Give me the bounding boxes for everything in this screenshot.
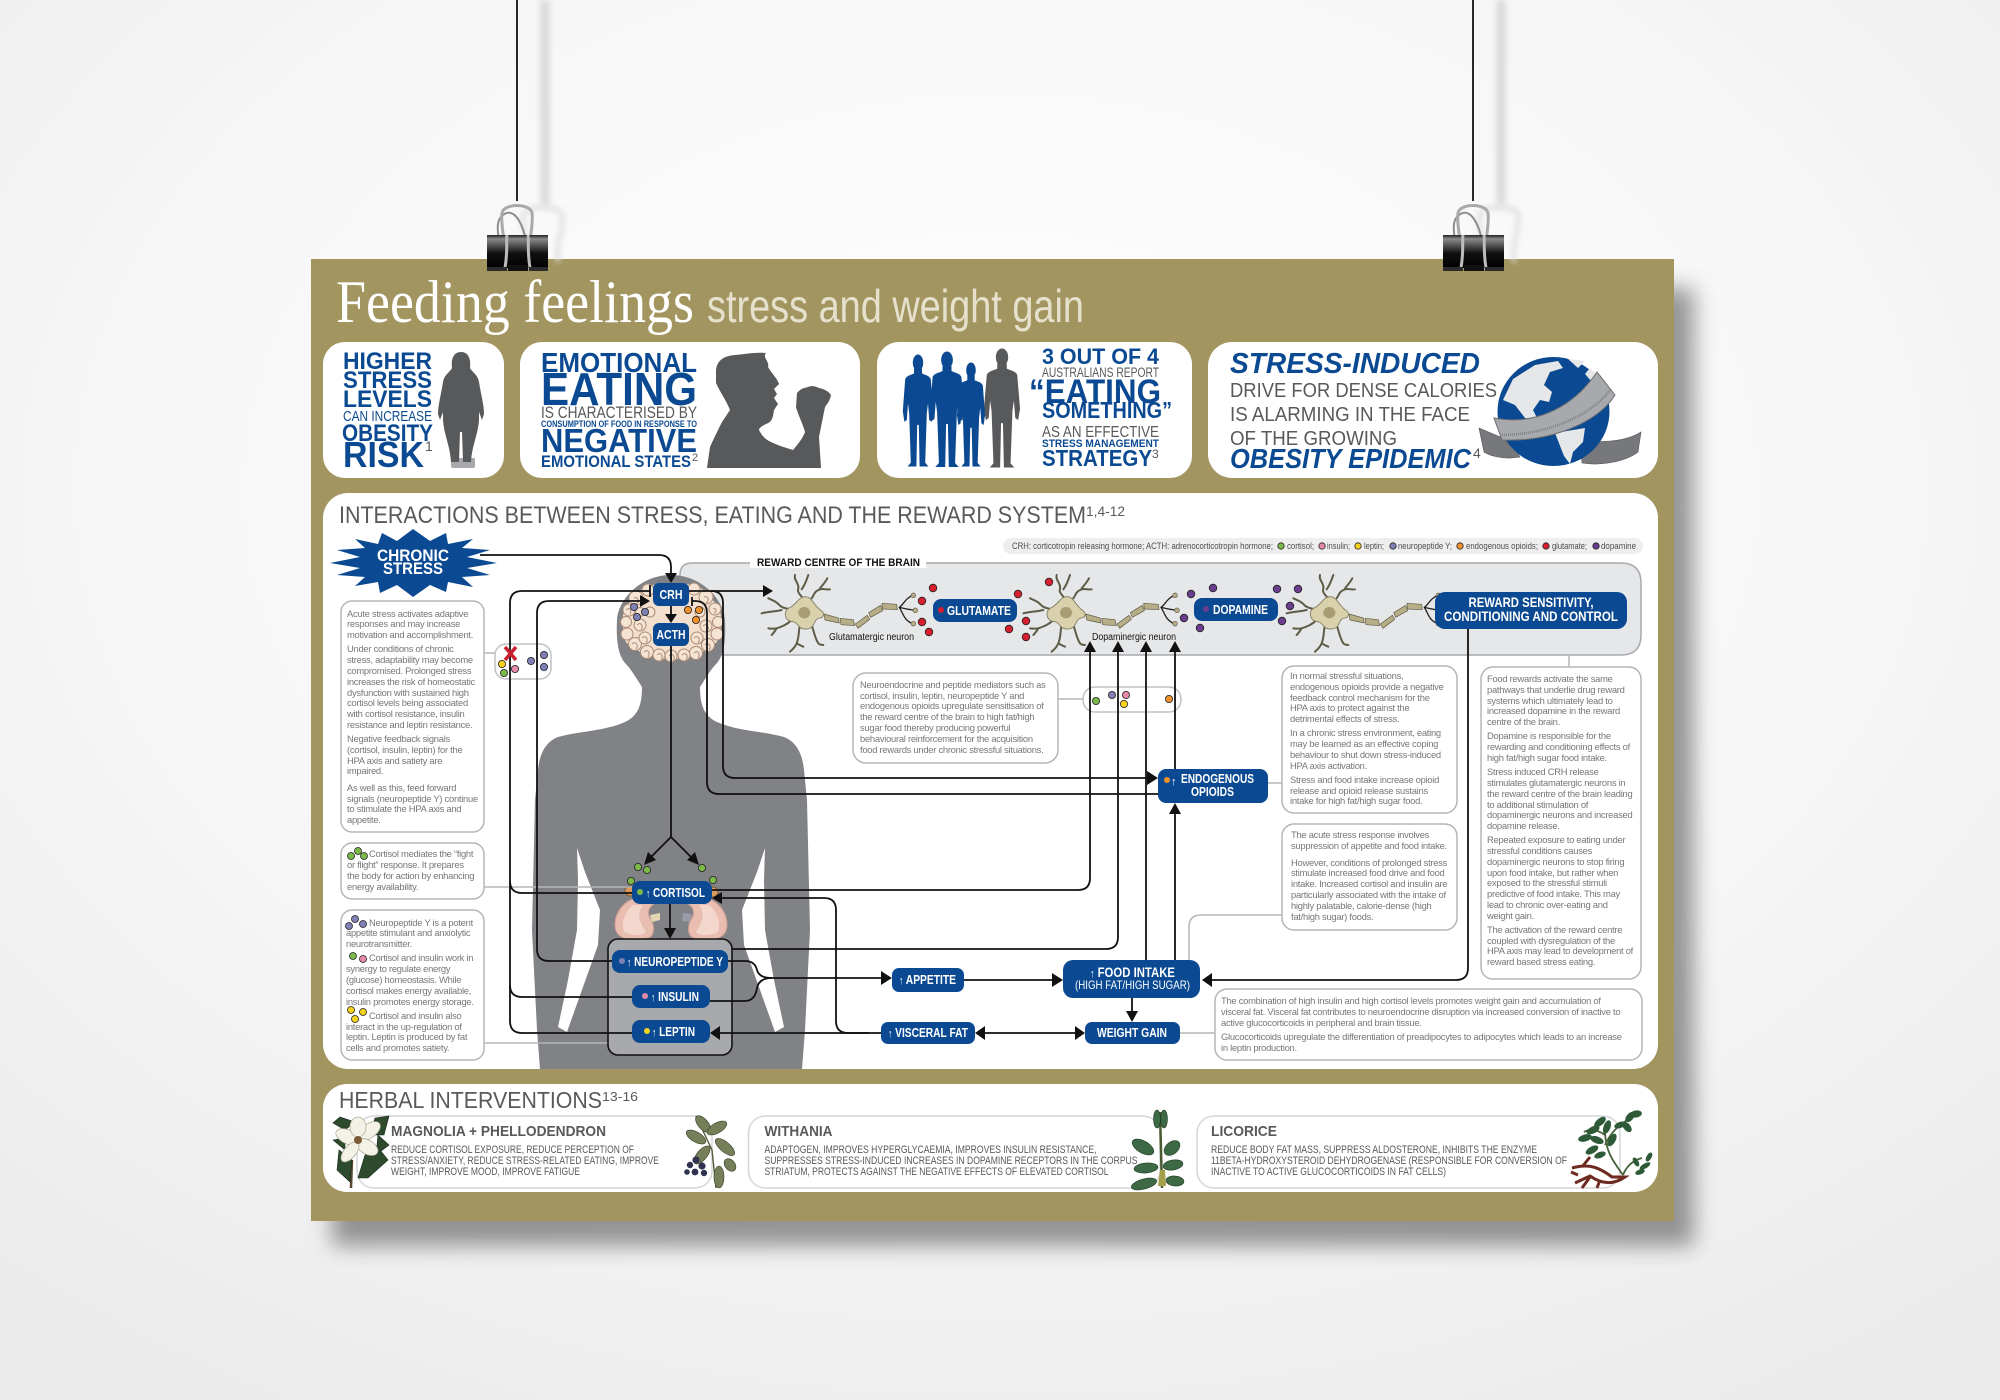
icon: brain — [620, 583, 724, 662]
icon: magnolia flower — [333, 1116, 389, 1188]
text box: endogenous opioids: In a chronic stress environment, eating — [1290, 727, 1441, 738]
card: obesity risk: 1 — [425, 438, 433, 454]
herb card: licorice: LICORICE — [1211, 1123, 1277, 1140]
poster shadow — [332, 288, 1694, 1246]
panel: reward centre of the brain — [676, 557, 1641, 655]
hormone dots: brain and side boxes — [498, 603, 1173, 885]
text box: acute stress: signals (neuropeptide Y) continue — [347, 793, 478, 804]
text box: neuropeptide Y, insulin and leptin: interact in the up-regulation of — [346, 1021, 462, 1032]
label: CRH: CRH — [660, 587, 682, 602]
text box: food rewards: reward based stress eating. — [1487, 956, 1595, 967]
text box: acute stress: resistance and leptin resistance. — [347, 719, 472, 730]
text box: food rewards: exposed to the stressful stimuli — [1487, 877, 1607, 888]
legend: insulin; — [1327, 541, 1350, 551]
neuron labels: Dopaminergic neuron — [1092, 632, 1176, 643]
binder clip left — [487, 0, 563, 271]
label: reward sensitivity: CONDITIONING AND CONTROL — [1444, 608, 1618, 624]
text box: food rewards: Dopamine is responsible for the — [1487, 730, 1611, 741]
legend: neuropeptide Y; — [1398, 541, 1452, 551]
text box: neuropeptide Y, insulin and leptin: appetite stimulant and anxiolytic — [346, 927, 471, 938]
card: emotional eating: NEGATIVE — [541, 422, 697, 459]
card: stress-induced drive — [1208, 342, 1658, 478]
text box: neuroendocrine mediators: the reward centre of the brain to high fat/high — [860, 711, 1034, 722]
text box: food rewards: stressful conditions causes — [1487, 845, 1593, 856]
text box: cortisol: energy availability. — [347, 881, 418, 892]
side box: blocked feedback signals — [495, 644, 551, 679]
text box: acute stress: impaired. — [347, 765, 383, 776]
label: neuropeptide Y: ↑ NEUROPEPTIDE Y — [627, 954, 723, 969]
card: 3 out of 4: AS AN EFFECTIVE — [1042, 424, 1159, 441]
text box: food rewards: centre of the brain. — [1487, 716, 1560, 727]
text box: neuropeptide Y, insulin and leptin: synergy to regulate energy — [346, 963, 451, 974]
label: food intake: ↑ FOOD INTAKE — [1090, 964, 1175, 980]
text box: appetite and food intake: particularly associated with the intake of — [1291, 889, 1446, 900]
label: CRH — [653, 583, 689, 606]
text box: acute stress: As well as this, feed forward — [347, 782, 456, 793]
card: stress-induced drive: 4 — [1473, 445, 1481, 461]
text box: visceral fat: Glucocorticoids upregulate the differentiation of preadipocytes to adipocytes which leads to an increase — [1221, 1031, 1622, 1042]
text box: food rewards: pathways that underlie drug reward — [1487, 684, 1625, 695]
card: 3 out of 4: 3 — [1152, 447, 1159, 461]
card: emotional eating: 2 — [692, 452, 698, 464]
text box: cortisol: Cortisol mediates the “fight — [369, 848, 474, 859]
text box: neuropeptide Y, insulin and leptin: Neuropeptide Y is a potent — [369, 917, 474, 928]
label: cortisol: ↑ CORTISOL — [646, 885, 705, 900]
text box: endogenous opioids: feedback control mechanism for the — [1290, 692, 1430, 703]
text box: acute stress: Negative feedback signals — [347, 733, 451, 744]
text box: neuroendocrine mediators: Neuroendocrine and peptide mediators such as — [860, 679, 1046, 690]
herb card: licorice: REDUCE BODY FAT MASS, SUPPRESS ALDOSTERONE, INHIBITS THE ENZYME — [1211, 1144, 1537, 1156]
legend: glutamate; — [1552, 541, 1587, 551]
text box: food rewards — [1481, 667, 1641, 979]
chronic stress burst: CHRONIC — [377, 546, 449, 565]
heading: interactions: 1,4-12 — [1086, 503, 1125, 519]
label: neuropeptide Y — [612, 950, 728, 973]
card: obesity risk: OBESITY — [342, 420, 433, 447]
legend: CRH: corticotropin releasing hormone; ACTH: adrenocorticotropin hormone; — [1012, 541, 1273, 551]
text box: food rewards: Food rewards activate the same — [1487, 673, 1613, 684]
text box: food rewards: increased dopamine in the reward — [1487, 705, 1620, 716]
card: obesity risk: HIGHER — [343, 348, 432, 375]
text box: acute stress: cortisol levels being associated — [347, 697, 468, 708]
herb card: magnolia + phellodendron: STRESS/ANXIETY, REDUCE STRESS-RELATED EATING, IMPROVE — [391, 1155, 659, 1167]
card: emotional eating: IS CHARACTERISED BY — [541, 404, 697, 422]
label: reward sensitivity — [1435, 592, 1627, 629]
text box: endogenous opioids: may be learned as an effective coping — [1290, 738, 1438, 749]
heading: interactions: INTERACTIONS BETWEEN STRESS, EATING AND THE REWARD SYSTEM — [339, 502, 1086, 529]
text box: endogenous opioids: intake for high fat/high sugar food. — [1290, 795, 1422, 806]
text box: food rewards: HPA axis may lead to development of — [1487, 945, 1634, 956]
text box: neuropeptide Y, insulin and leptin: cells and promotes satiety. — [346, 1042, 449, 1053]
card: stress-induced drive: OBESITY EPIDEMIC — [1230, 443, 1472, 474]
legend: cortisol; — [1287, 541, 1314, 551]
label: ACTH: ACTH — [656, 627, 686, 642]
label: leptin — [632, 1020, 710, 1043]
text box: food rewards: the reward centre of the brain leading — [1487, 788, 1632, 799]
card: 3 out of 4: SOMETHING” — [1042, 397, 1172, 423]
text box: cortisol — [341, 843, 484, 899]
herb card: withania: WITHANIA — [764, 1123, 833, 1140]
text box: neuropeptide Y, insulin and leptin: insulin promotes energy storage. — [346, 996, 474, 1007]
card: 3 out of 4: STRESS MANAGEMENT — [1042, 438, 1159, 450]
legend: dopamine — [1601, 541, 1636, 551]
text box: endogenous opioids: Stress and food intake increase opioid — [1290, 774, 1439, 785]
text box: endogenous opioids: release and opioid release sustains — [1290, 785, 1428, 796]
card: obesity risk: LEVELS — [343, 386, 432, 413]
arrows and pathways — [480, 555, 1468, 1040]
label: food intake: (HIGH FAT/HIGH SUGAR) — [1075, 978, 1190, 992]
card: 3 out of 4: STRATEGY — [1042, 445, 1152, 471]
text box: acute stress: increases the risk of homeostatic — [347, 676, 476, 687]
text box: acute stress: appetite. — [347, 814, 381, 825]
neuron labels — [829, 632, 1176, 643]
card: obesity risk: RISK — [343, 434, 424, 475]
text box: cortisol: the body for action by enhancing — [347, 870, 474, 881]
neuron: glutamatergic — [762, 575, 918, 652]
text box: neuropeptide Y, insulin and leptin: leptin. Leptin is produced by fat — [346, 1031, 468, 1042]
herb card: licorice — [1197, 1110, 1654, 1188]
text box: appetite and food intake: The acute stress response involves — [1291, 829, 1430, 840]
text box: neuroendocrine mediators: behavioural reinforcement for the acquisition — [860, 733, 1033, 744]
card: 3 out of 4: AUSTRALIANS REPORT — [1042, 365, 1159, 380]
label: ACTH — [653, 623, 689, 646]
text box: food rewards: The activation of the reward centre — [1487, 924, 1622, 935]
text box: visceral fat: in leptin production. — [1221, 1042, 1297, 1053]
label: endogenous opioids: OPIOIDS — [1191, 784, 1234, 799]
text box: neuropeptide Y, insulin and leptin — [341, 910, 484, 1060]
human body silhouette — [532, 575, 810, 1069]
text box: visceral fat: The combination of high insulin and high cortisol levels promotes weight gain and accumulation of — [1221, 995, 1601, 1006]
text box: acute stress: Under conditions of chronic — [347, 643, 454, 654]
card: emotional eating — [520, 342, 860, 478]
text box: acute stress: (cortisol, insulin, leptin) for the — [347, 744, 462, 755]
card: stress-induced drive: STRESS-INDUCED — [1230, 348, 1480, 380]
label: insulin: ↑ INSULIN — [651, 989, 699, 1004]
label: leptin: ↑ LEPTIN — [652, 1024, 695, 1039]
chronic stress burst: STRESS — [383, 559, 443, 578]
chart: grey organ box — [608, 939, 732, 1055]
neuron: dopaminergic — [1023, 575, 1179, 652]
label: endogenous opioids: ↑ — [1171, 776, 1176, 788]
text box: endogenous opioids: HPA axis activation. — [1290, 760, 1367, 771]
neuron labels: Glutamatergic neuron — [829, 632, 914, 643]
card: obesity risk: STRESS — [343, 367, 432, 394]
text box: endogenous opioids — [1282, 666, 1457, 813]
card: stress-induced drive: OF THE GROWING — [1230, 427, 1397, 450]
herb card: licorice: 11BETA-HYDROXYSTEROID DEHYDROGENASE (RESPONSIBLE FOR CONVERSION OF — [1211, 1155, 1567, 1167]
label: insulin — [632, 985, 710, 1008]
text box: acute stress: dysfunction with sustained high — [347, 687, 469, 698]
text box: acute stress: motivation and accomplishment. — [347, 629, 473, 640]
text box: appetite and food intake: fat/high sugar) foods. — [1291, 911, 1373, 922]
title — [336, 269, 1084, 335]
label: appetite — [892, 968, 964, 992]
text box: visceral fat — [1215, 989, 1642, 1060]
text box: neuropeptide Y, insulin and leptin: (glucose) homeostasis. While — [346, 974, 461, 985]
label: dopamine: DOPAMINE — [1213, 602, 1268, 617]
card: stress-induced drive: IS ALARMING IN THE FACE — [1230, 403, 1470, 426]
icon: woman on scales — [438, 352, 484, 468]
heading: herbal interventions: HERBAL INTERVENTIONS — [339, 1087, 602, 1113]
text box: acute stress: responses and may increase — [347, 618, 460, 629]
text box: neuropeptide Y, insulin and leptin: neurotransmitter. — [346, 938, 412, 949]
connector lines, grey — [484, 653, 1569, 1043]
text box: food rewards: systems which ultimately lead to — [1487, 695, 1613, 706]
text box: acute stress: compromised. Prolonged stress — [347, 665, 472, 676]
text box: food rewards: coupled with dysregulation of the — [1487, 935, 1615, 946]
herb card: withania: STRIATUM, PROTECTS AGAINST THE NEGATIVE EFFECTS OF ELEVATED CORTISOL — [764, 1166, 1109, 1178]
card: emotional eating: EMOTIONAL — [541, 347, 697, 378]
oval box: mediators — [1083, 687, 1181, 712]
icon: group of people — [903, 348, 1020, 467]
label: glutamate: GLUTAMATE — [947, 603, 1011, 618]
title: stress and weight gain — [707, 280, 1084, 332]
card: obesity risk: CAN INCREASE — [343, 409, 432, 425]
text box: visceral fat: active glucocorticoids in peripheral and brain tissue. — [1221, 1017, 1422, 1028]
text box: endogenous opioids: In normal stressful situations, — [1290, 670, 1403, 681]
text box: neuroendocrine mediators: cortisol, insulin, leptin, neuropeptide Y and — [860, 690, 1024, 701]
label: weight gain: WEIGHT GAIN — [1097, 1025, 1167, 1040]
panel: herbal interventions — [323, 1084, 1658, 1192]
text box: neuroendocrine mediators: endogenous opioids upregulate sensitisation of — [860, 700, 1044, 711]
text box: visceral fat: visceral fat. Visceral fat contributes to neuroendocrine disruption via increased conversion of inactive to — [1221, 1006, 1620, 1017]
text box: acute stress: with cortisol resistance, insulin — [346, 708, 465, 719]
text box: appetite and food intake: highly palatable, calorie-dense (high — [1291, 900, 1432, 911]
text box: food rewards: Stress induced CRH release — [1487, 766, 1599, 777]
panel: reward centre of the brain: REWARD CENTRE OF THE BRAIN — [757, 557, 920, 569]
text box: acute stress: HPA axis and satiety are — [347, 755, 442, 766]
herb card: withania — [748, 1110, 1184, 1192]
legend: endogenous opioids; — [1466, 541, 1538, 551]
text box: appetite and food intake: intake. Increased cortisol and insulin are — [1291, 878, 1447, 889]
text box: neuroendocrine mediators — [853, 673, 1058, 763]
text box: endogenous opioids: detrimental effects of stress. — [1290, 713, 1399, 724]
text box: food rewards: weight gain. — [1486, 910, 1534, 921]
text box: appetite and food intake — [1282, 824, 1457, 930]
legend: leptin; — [1364, 541, 1384, 551]
heading: herbal interventions: 13-16 — [602, 1089, 638, 1104]
label: glutamate — [933, 599, 1017, 622]
panel: interactions — [323, 493, 1658, 1069]
text box: appetite and food intake: However, conditions of prolonged stress — [1291, 857, 1448, 868]
herb card: withania: SUPPRESSES STRESS-INDUCED INCREASES IN DOPAMINE RECEPTORS IN THE CORPUS — [764, 1155, 1138, 1167]
text box: food rewards: lead to chronic over-eating and — [1487, 899, 1608, 910]
neuron: third — [1287, 575, 1443, 652]
label: visceral fat: ↑ VISCERAL FAT — [888, 1025, 968, 1040]
card: 3 out of 4: 3 OUT OF 4 — [1042, 344, 1160, 369]
label: dopamine — [1194, 598, 1278, 621]
text box: food rewards: rewarding and conditioning effects of — [1487, 741, 1631, 752]
text box: acute stress: stress, adaptability may become — [347, 654, 473, 665]
text box: appetite and food intake: suppression of appetite and food intake. — [1291, 840, 1447, 851]
text box: neuroendocrine mediators: sugar food thereby producing powerful — [860, 722, 1011, 733]
text box: food rewards: dopaminergic neurons and increased — [1487, 809, 1632, 820]
herb card: magnolia + phellodendron: WEIGHT, IMPROVE MOOD, IMPROVE FATIGUE — [391, 1166, 580, 1178]
text box: food rewards: Repeated exposure to eating under — [1487, 834, 1626, 845]
text box: food rewards: stimulates glutamatergic neurons in — [1487, 777, 1625, 788]
text box: food rewards: to additional stimulation of — [1487, 799, 1589, 810]
icon: withania plant — [1130, 1110, 1184, 1192]
card: emotional eating: CONSUMPTION OF FOOD IN RESPONSE TO — [541, 419, 697, 429]
text box: food rewards: high fat/high sugar food intake. — [1487, 752, 1607, 763]
text box: endogenous opioids: behaviour to shut down stress-induced — [1290, 749, 1441, 760]
text box: acute stress: Acute stress activates adaptive — [347, 608, 468, 619]
text box: food rewards: dopamine release. — [1487, 820, 1560, 831]
label: endogenous opioids — [1158, 769, 1268, 803]
card: emotional eating: EMOTIONAL STATES — [541, 453, 691, 471]
title: Feeding feelings — [336, 269, 694, 335]
label: weight gain — [1085, 1022, 1180, 1044]
card: obesity risk — [323, 342, 504, 478]
herb card: magnolia + phellodendron: MAGNOLIA + PHELLODENDRON — [391, 1123, 606, 1140]
herb card: withania: ADAPTOGEN, IMPROVES HYPERGLYCAEMIA, IMPROVES INSULIN RESISTANCE, — [764, 1144, 1096, 1156]
text box: acute stress: to stimulate the HPA axis and — [347, 803, 461, 814]
text box: cortisol: or flight” response. It prepares — [347, 859, 464, 870]
text box: acute stress — [341, 601, 484, 832]
text box: food rewards: upon food intake, but rather when — [1487, 867, 1618, 878]
label: reward sensitivity: REWARD SENSITIVITY, — [1468, 594, 1594, 610]
neurotransmitter dots — [918, 578, 1302, 641]
label: visceral fat — [881, 1022, 975, 1044]
text box: neuropeptide Y, insulin and leptin: Cortisol and insulin also — [369, 1010, 462, 1021]
binder clip right — [1443, 0, 1519, 271]
herb card: licorice: INACTIVE TO ACTIVE GLUCOCORTICOIDS IN FAT CELLS) — [1211, 1166, 1446, 1178]
text box: neuropeptide Y, insulin and leptin: cortisol makes energy available, — [346, 985, 471, 996]
label: food intake — [1063, 960, 1200, 998]
text box: endogenous opioids: endogenous opioids provide a negative — [1290, 681, 1444, 692]
card: 3 out of 4: “EATING — [1029, 373, 1161, 411]
icon: globe with measuring tape — [1479, 357, 1641, 466]
herb card: magnolia + phellodendron — [333, 1113, 738, 1188]
text box: endogenous opioids: HPA axis to protect against the — [1290, 702, 1409, 713]
text box: neuropeptide Y, insulin and leptin: Cortisol and insulin work in — [369, 952, 473, 963]
icon: red cross — [505, 647, 516, 660]
poster background — [311, 259, 1674, 1221]
herb card: magnolia + phellodendron: REDUCE CORTISOL EXPOSURE, REDUCE PERCEPTION OF — [391, 1144, 634, 1156]
text box: food rewards: dopaminergic neurons to stop firing — [1487, 856, 1624, 867]
label: cortisol — [632, 881, 712, 904]
card: emotional eating: EATING — [541, 363, 697, 415]
text box: food rewards: predictive of food intake. This may — [1487, 888, 1621, 899]
label: appetite: ↑ APPETITE — [899, 972, 956, 987]
icon: licorice plant and root — [1571, 1110, 1654, 1188]
legend — [1003, 538, 1643, 554]
text box: neuroendocrine mediators: food rewards under chronic stressful situations. — [860, 744, 1043, 755]
icon: kidneys and adrenal glands — [615, 886, 727, 940]
icon: phellodendron — [684, 1113, 738, 1188]
icon: man eating silhouette — [707, 353, 831, 468]
chronic stress burst — [330, 529, 497, 597]
card: stress-induced drive: DRIVE FOR DENSE CALORIES — [1230, 379, 1497, 402]
card: 3 out of 4 — [877, 342, 1192, 478]
label: endogenous opioids: ENDOGENOUS — [1181, 771, 1254, 786]
text box: appetite and food intake: stimulate increased food drive and food — [1291, 867, 1445, 878]
